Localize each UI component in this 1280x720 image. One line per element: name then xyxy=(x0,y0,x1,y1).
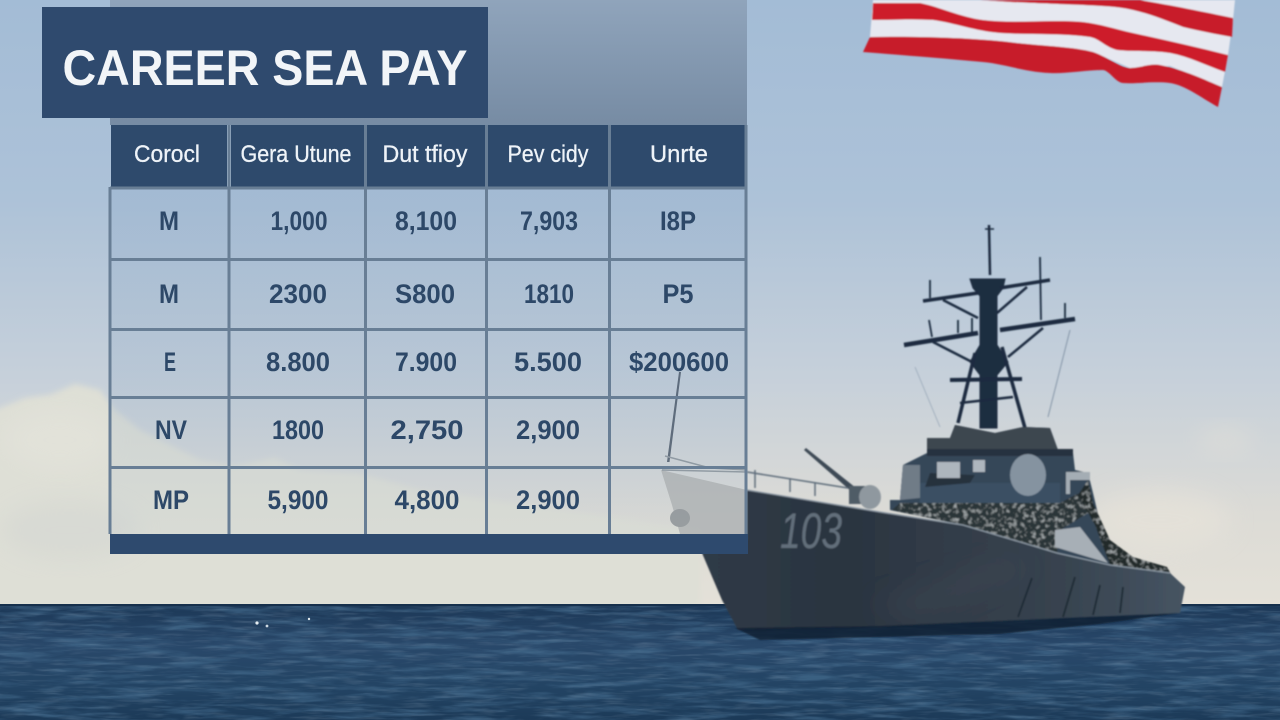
table grid lines xyxy=(110,125,746,534)
ship windows xyxy=(937,460,985,478)
flag red stripe top xyxy=(980,0,1233,37)
table row 1: M xyxy=(159,206,179,236)
table row 2: M xyxy=(159,279,179,309)
flag white stripes xyxy=(870,0,1235,87)
table row 4: 2,900 xyxy=(516,415,580,445)
table row 3: 7.900 xyxy=(395,347,457,377)
flag red stripe middle xyxy=(872,3,1228,72)
flag red stripe bottom xyxy=(863,37,1222,107)
table row 3: E xyxy=(164,347,176,377)
table row 1: I8P xyxy=(660,206,696,236)
ship waterline shadow xyxy=(735,613,1180,640)
table row 5 xyxy=(153,485,580,515)
table header row: Unrte xyxy=(650,141,708,168)
ship mast xyxy=(904,225,1075,428)
table row 2: 2300 xyxy=(269,279,327,309)
sea xyxy=(0,605,1280,720)
table row 3 xyxy=(164,347,729,377)
ship hull panel seams xyxy=(1018,577,1123,617)
table row 4: 2,750 xyxy=(390,415,464,445)
table row 1 xyxy=(159,206,696,236)
table row 3: 5.500 xyxy=(514,347,582,377)
table row 5: MP xyxy=(153,485,189,515)
table row 4: NV xyxy=(155,415,187,445)
table row 4 xyxy=(155,415,580,445)
table row 3: 8.800 xyxy=(266,347,330,377)
ship railing xyxy=(747,470,848,496)
panel: translucent table background xyxy=(110,0,747,535)
table row 3: $200600 xyxy=(629,347,729,377)
table row 2: P5 xyxy=(662,279,694,309)
ship radar panel xyxy=(1010,454,1046,496)
table header row xyxy=(111,125,746,187)
ship gun xyxy=(804,448,881,509)
ship bow behind panel xyxy=(661,372,747,534)
ship mid-deck equipment xyxy=(892,490,1093,553)
table row 1: 8,100 xyxy=(395,206,457,236)
ship hull xyxy=(700,490,1185,630)
table row 2: 1810 xyxy=(524,279,574,309)
table row 2: S800 xyxy=(395,279,455,309)
title banner xyxy=(42,7,488,118)
table row 2 xyxy=(159,279,694,309)
table row 1: 1,000 xyxy=(270,206,328,236)
clouds xyxy=(0,384,1253,606)
title text: CAREER SEA PAY xyxy=(62,40,468,96)
table row 4: 1800 xyxy=(272,415,324,445)
table header row: Dut tfioy xyxy=(382,141,468,168)
table row 5: 2,900 xyxy=(516,485,580,515)
table: career sea pay xyxy=(110,125,748,554)
table footer bar xyxy=(110,534,748,554)
table header row: Pev cidy xyxy=(508,141,588,168)
table header row: Corocl xyxy=(134,141,200,168)
warship xyxy=(700,225,1185,640)
icon: american flag xyxy=(863,0,1235,107)
hull number: 103 xyxy=(780,503,842,559)
table row 1: 7,903 xyxy=(520,206,578,236)
table header row: Gera Utune xyxy=(240,141,352,168)
table row 5: 4,800 xyxy=(394,485,460,515)
table row 5: 5,900 xyxy=(268,485,328,515)
ship superstructure xyxy=(890,425,1110,565)
